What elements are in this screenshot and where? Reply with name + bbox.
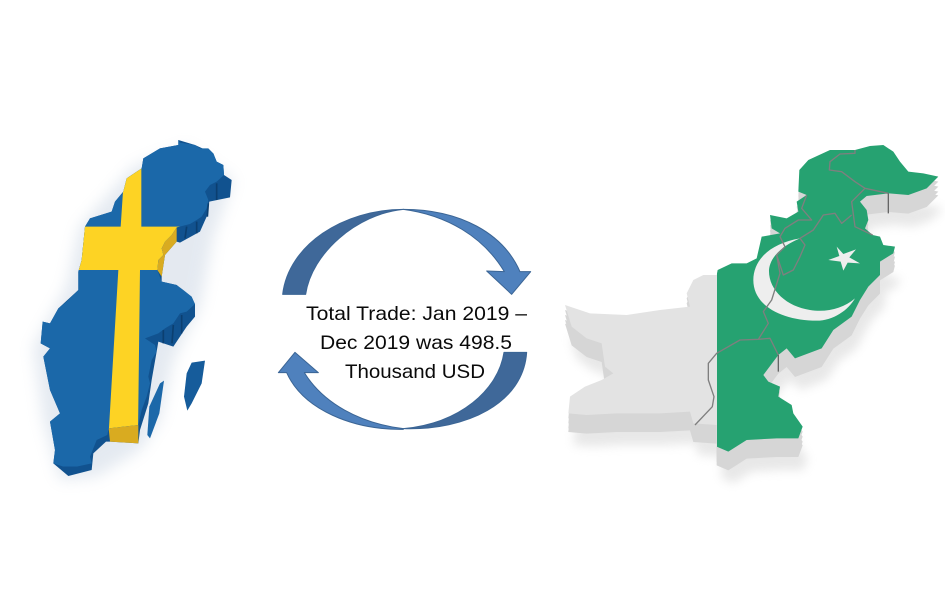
map body: side walls (41, 140, 232, 476)
island: Oland (147, 381, 164, 438)
arrow: bottom, Pakistan to Sweden (278, 352, 527, 429)
white band (565, 274, 717, 446)
yellow cross (77, 167, 180, 433)
map shadow (33, 147, 233, 480)
island: Gotland (184, 361, 205, 411)
blue field (40, 140, 224, 466)
arrow: top, Sweden to Pakistan (283, 209, 531, 294)
map top surface with flag (565, 145, 938, 452)
map shadow (570, 177, 943, 483)
map body: side walls (565, 150, 938, 470)
trade cycle arrows (278, 209, 531, 429)
text: total trade caption: Total Trade: Jan 2019 – (306, 303, 527, 325)
map top surface with flag (40, 140, 224, 466)
text: total trade caption: Dec 2019 was 498.5 (320, 332, 512, 354)
star (828, 247, 860, 271)
panel: Pakistan map (565, 145, 940, 484)
yellow side walls (80, 227, 177, 443)
dark wall grooves (163, 183, 217, 343)
green field (717, 145, 938, 452)
text: total trade caption: Thousand USD (345, 361, 485, 383)
infographic canvas (31, 140, 940, 484)
text: total trade caption (306, 303, 527, 383)
panel: Sweden map (33, 133, 240, 480)
province borders (695, 150, 888, 425)
crescent (753, 238, 855, 321)
